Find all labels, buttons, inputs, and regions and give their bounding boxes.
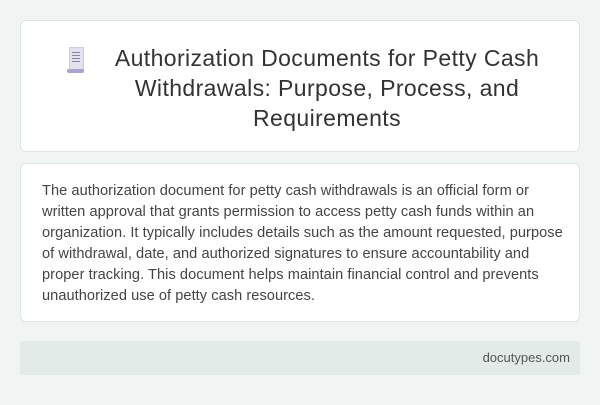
text block: description: organization. It typically includes details such as the amount requested, purpose [42,225,563,241]
title [115,45,539,131]
text block: description: proper tracking. This document helps maintain financial control and prevents [42,267,539,283]
title: Authorization Documents for Petty Cash [115,45,539,71]
footer [20,341,580,375]
text block: description: unauthorized use of petty cash resources. [42,288,315,304]
title: Withdrawals: Purpose, Process, and [135,75,519,101]
panel: description [20,163,580,322]
text block: description: written approval that grants permission to access petty cash funds within an [42,204,534,220]
panel: title card [20,20,580,152]
text block: description: The authorization document for petty cash withdrawals is an official form or [42,183,529,199]
title: Requirements [253,105,401,131]
icon: document [67,47,84,73]
text block: description [42,183,563,304]
footer text: docutypes.com [483,350,570,365]
text block: description: of withdrawal, date, and authorized signatures to ensure accountability and [42,246,529,262]
